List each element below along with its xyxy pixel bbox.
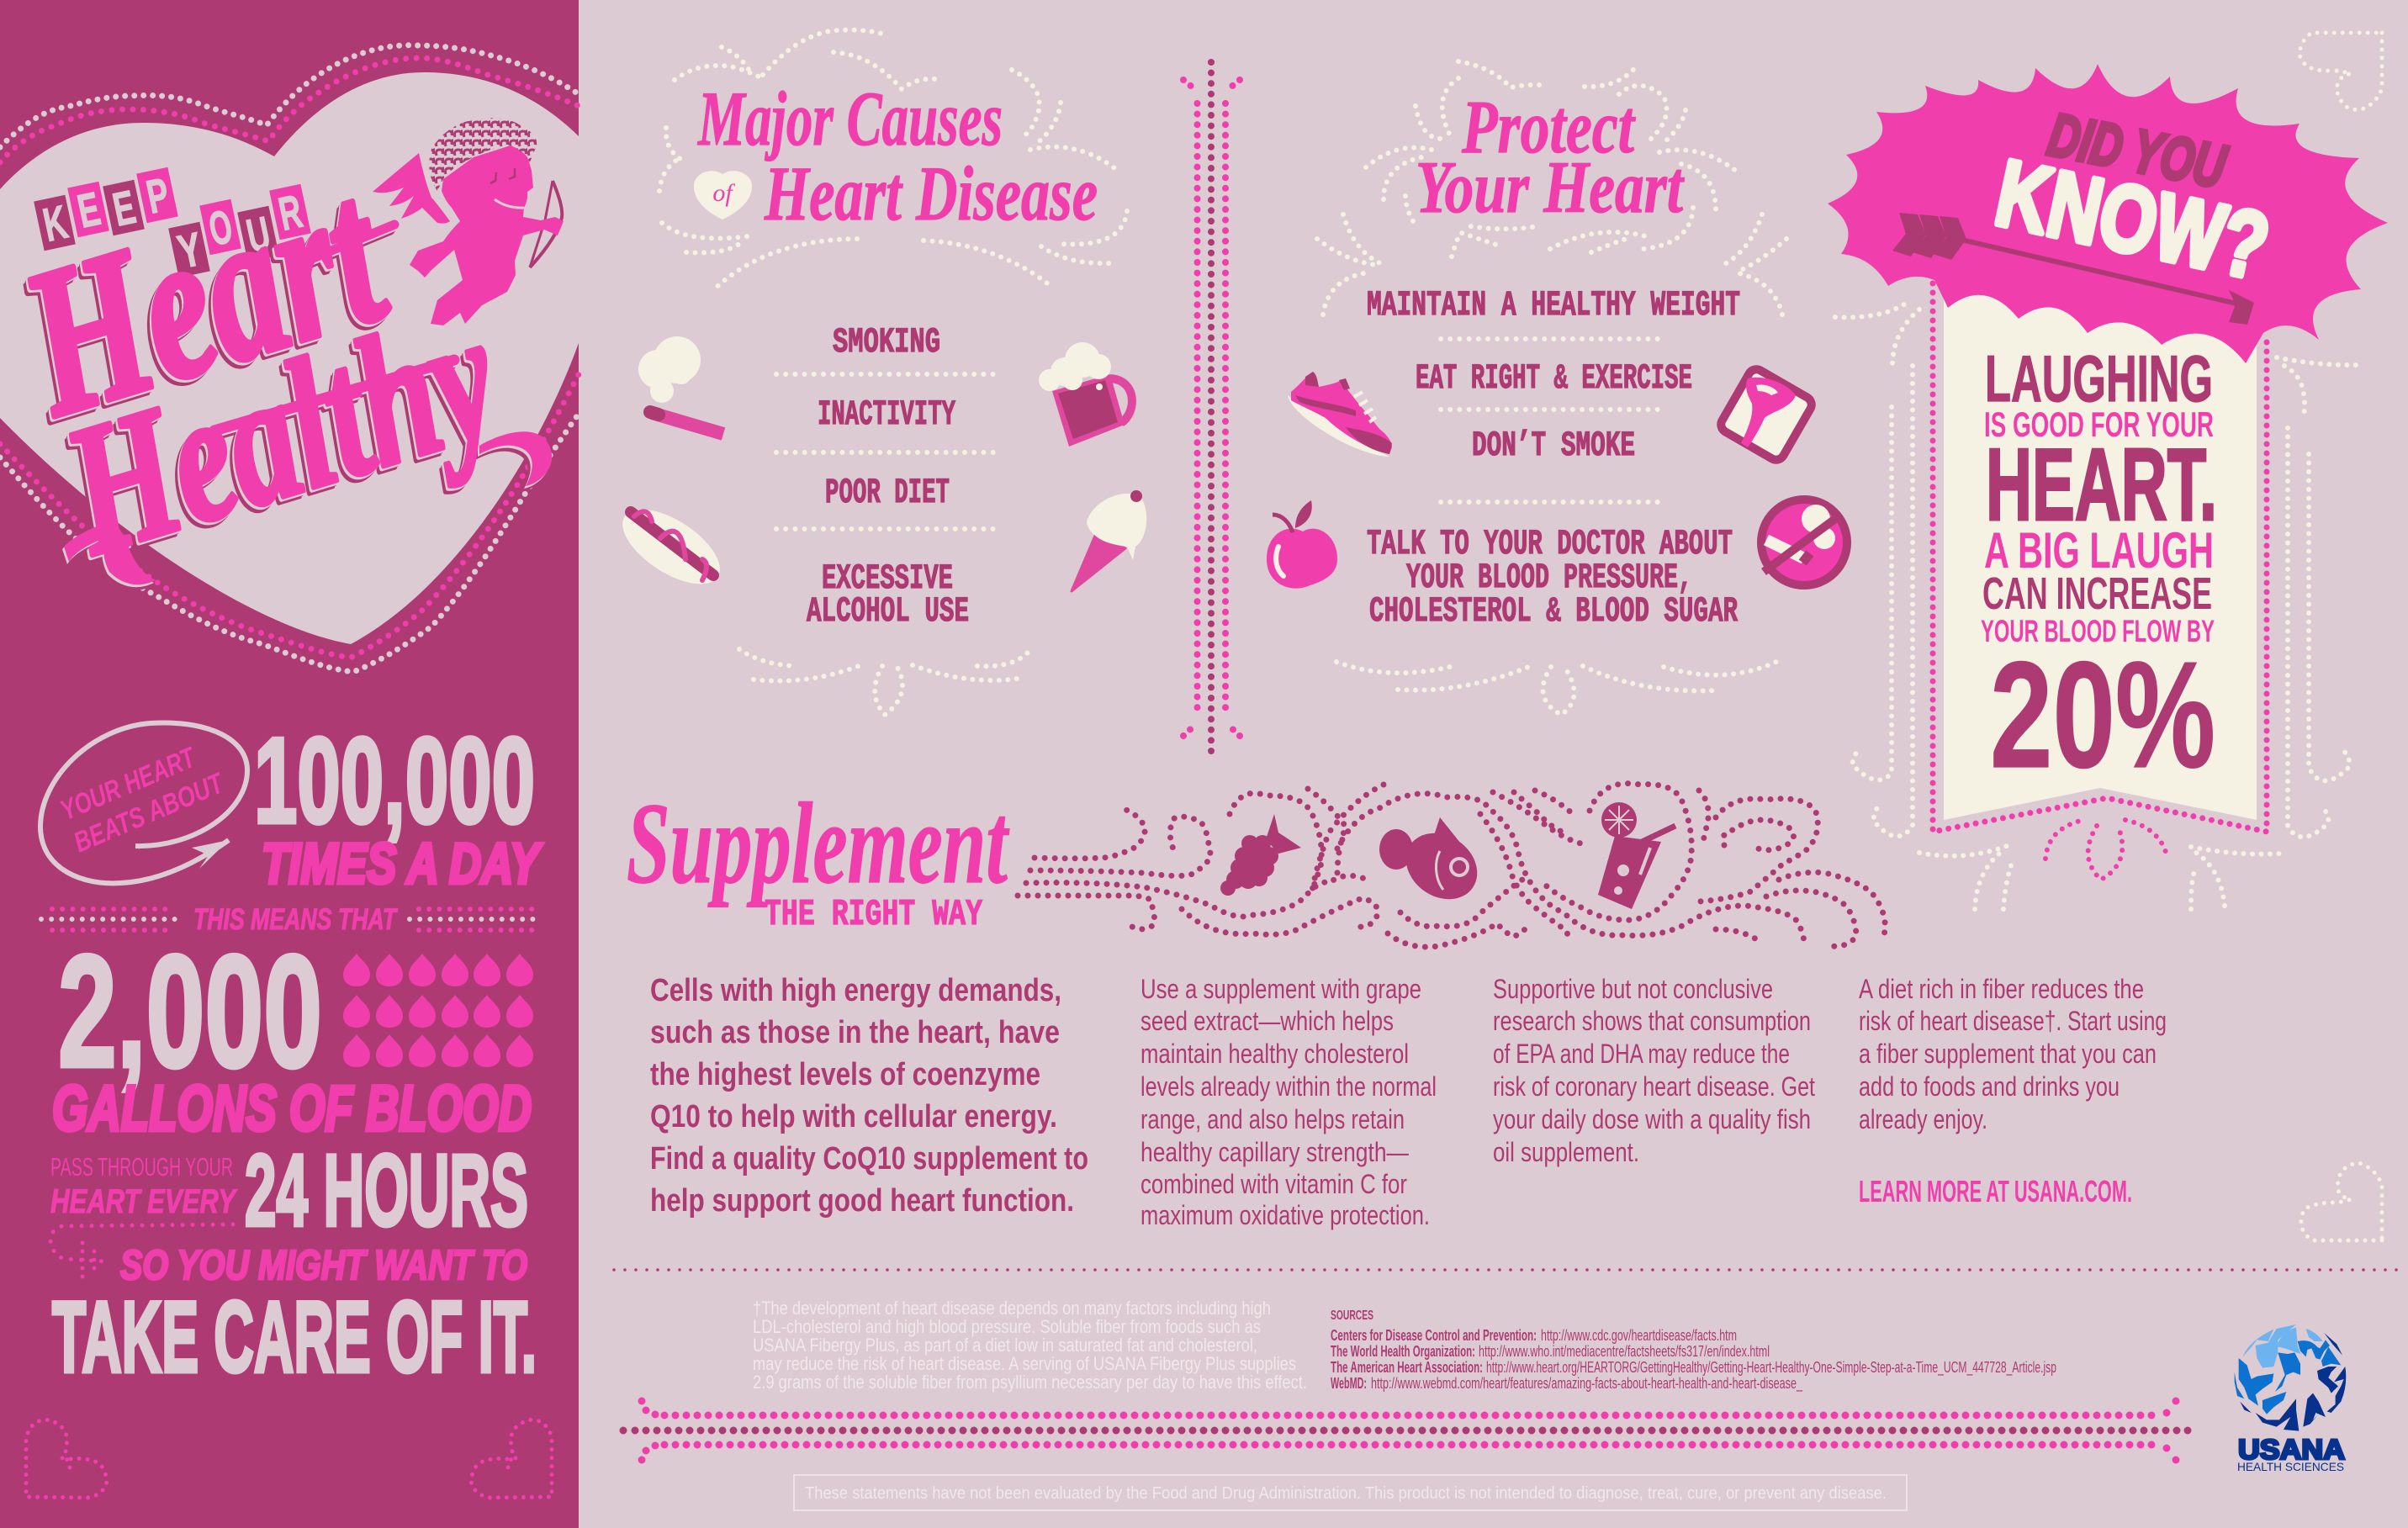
icon: hot dog [611, 494, 732, 599]
logo wordmark: USANA [2238, 1434, 2345, 1465]
text: grape seed: maximum oxidative protection. [1140, 1200, 1430, 1230]
heading: supplement: Supplement [627, 779, 1009, 907]
list: causes [776, 322, 1000, 632]
text: coenzyme q10: Cells with high energy demands, [650, 973, 1061, 1008]
lettering swashes [64, 225, 552, 584]
icon: fish [1379, 817, 1490, 912]
cupid face [490, 168, 515, 183]
panel: left sidebar [0, 0, 579, 1528]
list: causes: INACTIVITY [818, 394, 956, 435]
Heart script word: Heart [0, 134, 410, 461]
heading: heart disease: Heart Disease [764, 151, 1098, 236]
stat label: times a day: TIMES A DAY [262, 832, 542, 896]
text: grape seed: combined with vitamin C for [1140, 1169, 1407, 1199]
divider: vertical dotted column [1183, 62, 1240, 753]
list: protective actions: CHOLESTEROL & BLOOD SUGAR [1369, 591, 1739, 632]
text: coenzyme q10: help support good heart function. [650, 1183, 1074, 1219]
logo: USANA [2235, 1324, 2346, 1473]
sources: WebMD: [1331, 1375, 1367, 1392]
oval text: YOUR HEART [56, 741, 202, 827]
footnote text: †The development of heart disease depends on many factors including high [753, 1298, 1271, 1319]
stat: 24 hours: 24 HOURS [245, 1133, 528, 1247]
flourish: heading dots [1317, 61, 1786, 715]
text: take care of it: TAKE CARE OF IT. [52, 1281, 537, 1393]
list: causes: POOR DIET [825, 473, 950, 513]
keep your letter tiles [34, 167, 311, 279]
text: fiber: a fiber supplement that you can [1859, 1039, 2157, 1069]
text: grape seed: range, and also helps retain [1140, 1104, 1405, 1134]
sources: http://www.who.int/mediacentre/factsheets/fs317/en/index.html [1479, 1343, 1770, 1360]
list: protective actions: MAINTAIN A HEALTHY WEIGHT [1367, 285, 1740, 325]
flourish: heading dots [659, 30, 1127, 291]
text: fiber: risk of heart disease†. Start using [1859, 1006, 2167, 1036]
logo tagline: HEALTH SCIENCES [2237, 1460, 2344, 1473]
sources [1331, 1309, 2056, 1393]
text: grape seed: healthy capillary strength— [1140, 1137, 1409, 1167]
text: fish oil: research shows that consumption [1493, 1006, 1811, 1036]
icon: no smoking [1761, 500, 1847, 585]
sources: SOURCES [1331, 1309, 1373, 1323]
icon: of heart: of [712, 179, 735, 207]
Healthy script word: Healthy [43, 271, 519, 594]
text: fiber: A diet rich in fiber reduces the [1859, 974, 2144, 1004]
starburst [1828, 64, 2388, 363]
heading: know: KNOW? [1987, 140, 2278, 299]
text: fiber: add to foods and drinks you [1859, 1071, 2120, 1102]
keep your letter tiles: E [73, 182, 104, 238]
subheading: the right way: THE RIGHT WAY [765, 894, 982, 936]
text: fish oil: risk of coronary heart disease. Get [1493, 1071, 1815, 1102]
keep your letter tiles: R [274, 184, 306, 241]
text: laughing fact: CAN INCREASE [1982, 568, 2212, 619]
text: pass through your heart every [50, 1152, 238, 1220]
list: protective actions: DON’T SMOKE [1472, 426, 1635, 466]
heart dotted outline [0, 45, 579, 672]
cupid smile [495, 199, 524, 208]
text: laughing fact: IS GOOD FOR YOUR [1984, 404, 2214, 444]
text: laughing fact: A BIG LAUGH [1984, 522, 2214, 579]
keep your letter tiles: P [142, 167, 173, 224]
text: pass through your heart every: HEART EVERY [50, 1183, 238, 1220]
icon: dotted heart top right [2300, 33, 2382, 110]
list: protective actions [1367, 285, 1740, 632]
stat: heartbeats oval callout [40, 722, 247, 883]
oval arrow [40, 722, 247, 883]
text: grape seed: levels already within the normal [1140, 1071, 1437, 1102]
heading: protect your heart: Protect [1461, 86, 1636, 169]
icon: running shoe [1288, 372, 1392, 457]
icon: cigarette [638, 336, 723, 434]
text: coenzyme q10: such as those in the heart, have [650, 1015, 1060, 1050]
keep your letter tiles: O [204, 199, 236, 256]
sources: http://www.heart.org/HEARTORG/GettingHealthy/Getting-Heart-Healthy-One-Simple-Step-at-a-Time_UCM_447728_Article.jsp [1486, 1359, 2056, 1377]
text: grape seed: Use a supplement with grape [1140, 974, 1421, 1004]
banner [1944, 286, 2257, 820]
sources: The World Health Organization: [1331, 1343, 1475, 1360]
list: causes: SMOKING [833, 322, 940, 362]
sources: http://www.webmd.com/heart/features/amazing-facts-about-heart-health-and-heart-disease_ [1371, 1375, 1803, 1393]
text: fiber: already enjoy. [1859, 1104, 1987, 1134]
list: protective actions: EAT RIGHT & EXERCISE [1416, 358, 1692, 399]
cupid hair [429, 118, 537, 191]
FDA disclaimer box [794, 1475, 1907, 1510]
text: grape seed: seed extract—which helps [1140, 1006, 1394, 1036]
arrow: dotted connector [50, 1224, 233, 1280]
text: pass through your heart every: PASS THROUGH YOUR [50, 1152, 233, 1182]
divider: horizontal triple dotted bar [619, 1398, 2194, 1463]
text: grape seed [1140, 974, 1437, 1230]
icon: scale [1718, 367, 1814, 463]
text: coenzyme q10: Q10 to help with cellular energy. [650, 1099, 1057, 1134]
keep your letter tiles: K [39, 195, 71, 251]
list: causes: EXCESSIVE [822, 558, 953, 599]
text: grape seed: maintain healthy cholesterol [1140, 1039, 1409, 1069]
icon: grapes [1220, 814, 1301, 896]
icon: dotted heart left [26, 1420, 107, 1498]
icon: of heart [694, 171, 752, 219]
list: causes: ALCOHOL USE [807, 591, 969, 632]
flourish: list bottom dots [739, 647, 1033, 715]
heading: did you: DID YOU [2043, 101, 2232, 201]
sources: Centers for Disease Control and Prevention: [1331, 1327, 1537, 1344]
panel: protect your heart [1267, 61, 1847, 715]
cupid body [410, 145, 564, 325]
heart shape [0, 72, 579, 644]
text: fish oil [1493, 974, 1815, 1167]
icon: dotted heart lower right [2301, 1163, 2382, 1240]
text: coenzyme q10 [650, 973, 1088, 1219]
icon: beer mug [1039, 342, 1132, 447]
text: fish oil: your daily dose with a quality fish [1493, 1104, 1811, 1134]
heading: protect your heart: Your Heart [1416, 147, 1685, 229]
icon: apple [1267, 500, 1337, 589]
cupid wing [373, 153, 450, 224]
icon: blood drops grid [343, 954, 533, 1067]
keep your letter tiles: U [242, 206, 274, 262]
footnote text: USANA Fibergy Plus, as part of a diet low in saturated fat and cholesterol, [753, 1335, 1257, 1356]
text: coenzyme q10: Find a quality CoQ10 supplement to [650, 1141, 1088, 1176]
FDA disclaimer box: These statements have not been evaluated by the Food and Drug Administration. This product is not intended to diagnose, treat, cure, or prevent any disease. [805, 1484, 1887, 1503]
footnote text [753, 1298, 1307, 1393]
panel: did you know [1828, 33, 2388, 1240]
footnote text: LDL-cholesterol and high blood pressure. Soluble fiber from foods such as [753, 1316, 1261, 1337]
heading: major causes: Major Causes [697, 76, 1003, 161]
divider row: this means that [41, 903, 542, 936]
icon: dotted heart right [471, 1420, 552, 1498]
panel: major causes of heart disease [611, 30, 1146, 715]
list: protective actions: TALK TO YOUR DOCTOR ABOUT [1367, 524, 1733, 564]
banner dotted border [1933, 283, 2267, 832]
link text: learn more: LEARN MORE AT USANA.COM. [1859, 1174, 2132, 1208]
flourish: dotted waves [1018, 784, 1885, 947]
text: fish oil: of EPA and DHA may reduce the [1493, 1039, 1790, 1069]
stat: 2,000: 2,000 [58, 923, 322, 1101]
footnote text: may reduce the risk of heart disease. A serving of USANA Fibergy Plus supplies [753, 1353, 1296, 1374]
text: fish oil: oil supplement. [1493, 1137, 1639, 1167]
footnote text: 2.9 grams of the soluble fiber from psyllium necessary per day to have this effect. [753, 1372, 1307, 1393]
text: fish oil: Supportive but not conclusive [1493, 974, 1773, 1004]
text: fiber [1859, 974, 2167, 1134]
oval text: BEATS ABOUT [69, 767, 230, 859]
heading: protect your heart [1416, 86, 1685, 229]
divider row: this means that: THIS MEANS THAT [193, 903, 398, 936]
text: coenzyme q10: the highest levels of coenzyme [650, 1057, 1040, 1092]
cupid bow [530, 181, 562, 267]
logo globe [2235, 1324, 2346, 1431]
cupid illustration [373, 118, 564, 325]
keep your letter tiles: Y [173, 222, 206, 278]
text: laughing fact: YOUR BLOOD FLOW BY [1981, 614, 2215, 648]
flourish: side dots [1835, 301, 2361, 909]
text: laughing fact: LAUGHING [1985, 341, 2213, 415]
text: so you might want to: SO YOU MIGHT WANT TO [120, 1243, 527, 1288]
icon: ice cream cone [1072, 490, 1146, 591]
icon: juice drink [1598, 802, 1675, 909]
text: laughing fact: HEART. [1986, 427, 2217, 542]
stat: 100,000: 100,000 [254, 712, 535, 849]
list: protective actions: YOUR BLOOD PRESSURE, [1406, 558, 1692, 598]
sources: http://www.cdc.gov/heartdisease/facts.htm [1541, 1327, 1737, 1344]
title: Heart Healthy [0, 134, 552, 594]
keep your letter tiles: E [108, 180, 140, 236]
sources: The American Heart Association: [1331, 1359, 1483, 1376]
panel: supplement the right way [627, 779, 2167, 1230]
stat label: gallons of blood: GALLONS OF BLOOD [52, 1073, 532, 1145]
text: laughing fact: 20% [1990, 631, 2215, 800]
text: laughing fact [1981, 341, 2217, 800]
arrow: in starburst [1892, 213, 2254, 325]
